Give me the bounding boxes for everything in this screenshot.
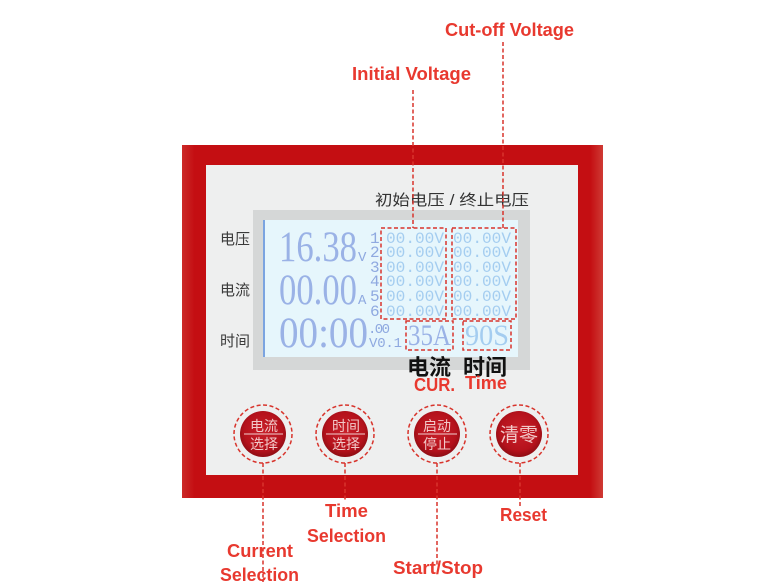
channel numbers [370,230,380,321]
initial voltage values: 00.00V [386,230,444,248]
device frame [182,145,603,498]
side labels: 电流 [220,282,250,299]
label: Initial Voltage: Initial Voltage [352,64,471,84]
LCD captions: 电流 [407,355,451,380]
button: time selection: 时间 [332,418,360,434]
label: Current Selection [220,541,299,585]
button: current selection: 选择 [250,436,278,452]
initial voltage values: 00.00V [386,259,444,277]
main readouts: 16.38 [279,224,357,271]
label: Current Selection: Current [227,541,293,561]
label: Cut-off Voltage: Cut-off Voltage [445,20,574,40]
current setting: 35A [408,319,451,352]
white control panel [206,165,578,475]
button: start/stop [408,405,466,463]
label: Time Selection: Time [325,501,368,521]
button: current selection [234,405,292,463]
LCD screen: 00:00 [279,310,368,357]
time setting: 90S [465,319,509,352]
button: time selection: 选择 [332,436,360,452]
button: start/stop: 停止 [423,436,451,452]
label: Current Selection: Selection [220,565,299,585]
channel numbers: 6 [370,303,380,321]
screen bezel [253,210,530,370]
cut-off voltage values: 00.00V [453,259,511,277]
side labels [220,231,250,350]
initial voltage values: 00.00V [386,288,444,306]
LCD screen: 00.00 [279,267,357,314]
LCD screen [263,220,518,357]
label: Start/Stop: Start/Stop [393,558,483,578]
button: time selection [316,405,374,463]
channel numbers: 2 [370,244,380,262]
initial voltage values: 00.00V [386,244,444,262]
cut-off voltage values: 00.00V [453,230,511,248]
side labels: 时间 [220,333,250,350]
cut-off voltage values [453,230,511,321]
cut-off voltage values: 00.00V [453,244,511,262]
channel numbers: 5 [370,288,380,306]
side labels: 电压 [220,231,250,248]
button: reset [490,405,548,463]
heading: initial / cut-off voltage: 初始电压 / 终止电压 [375,192,529,209]
cut-off voltage values: 00.00V [453,273,511,291]
initial voltage values: 00.00V [386,273,444,291]
dashed highlight boxes [381,228,516,350]
LCD screen: V [358,250,367,266]
button: current selection: 电流 [250,418,278,434]
LCD screen: A [358,293,367,309]
cut-off voltage values: 00.00V [453,303,511,321]
LCD captions [407,355,507,380]
leader lines [263,42,520,582]
cut-off voltage values: 00.00V [453,288,511,306]
label: Time: Time [465,373,507,393]
channel numbers: 4 [370,273,380,291]
label: Reset: Reset [500,505,547,525]
button: reset: 清零 [500,424,538,446]
LCD captions: 时间 [463,355,507,380]
button: start/stop: 启动 [423,418,451,434]
label: Time Selection [307,501,386,546]
label: CUR.: CUR. [414,375,455,395]
initial voltage values [386,230,444,321]
initial voltage values: 00.00V [386,303,444,321]
label: Time Selection: Selection [307,526,386,546]
channel numbers: 1 [370,230,380,248]
LCD screen: .00 [368,322,390,338]
LCD screen: V0.1 [369,336,402,352]
channel numbers: 3 [370,259,380,277]
